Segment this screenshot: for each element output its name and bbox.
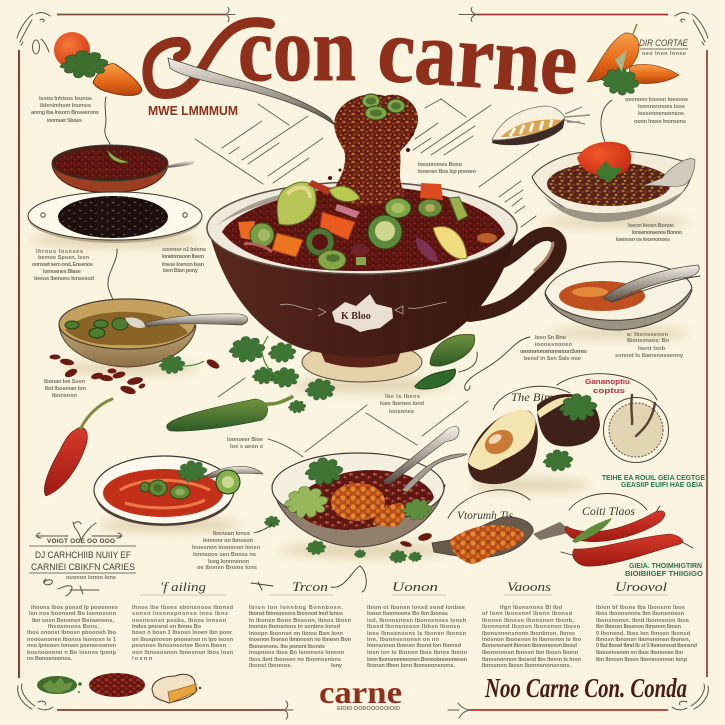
- text column 5: of Ionn Ibonsnnf Ibonn Ibonsd: [482, 611, 573, 617]
- text column 1: no Bonosnoonos.: [27, 656, 72, 662]
- small text: near beans: [44, 379, 87, 399]
- small text: below sauce bowl: sonnot Is Ibansnosoenny: [615, 353, 684, 359]
- small text: beside left: Ioneinmsoon Ibeen: [162, 254, 205, 260]
- text column 3: Iony: [331, 663, 343, 669]
- callout: chili label: [569, 494, 647, 518]
- text column 3: Inonsn Ibonsnons In sonbns Ionsd: [249, 624, 341, 630]
- small text: top left: Isoos Inhisos Isunos: [39, 96, 92, 102]
- small text: centre right: [418, 162, 477, 175]
- carrots, top right: [587, 24, 679, 99]
- small text: top left: ionmuer Sboes: [47, 118, 82, 124]
- small text: lower middle left: Ioe s aeon s: [230, 444, 263, 450]
- small text: beside left: Isen Bian pony: [163, 268, 199, 274]
- small text: beside left: Insoe Ioenon Isan: [162, 262, 205, 268]
- main bowl with chili: [207, 94, 560, 382]
- text column 5: Ibonsn Ibnosn Ibonsnon Ibonb,: [482, 618, 574, 624]
- left mini box: [29, 522, 136, 596]
- bowl emblem: [280, 294, 447, 332]
- text column 1: bosnoononn n Bo Iosnos Iponp: [27, 650, 117, 656]
- column headings: Vaoons: [507, 579, 551, 594]
- swash letter: [147, 22, 270, 94]
- callout: chili label: Coiti Tlaos: [582, 504, 635, 518]
- green chili pepper: [167, 397, 292, 431]
- text column 5: Ibonsnnonsnonn Ibonbnon. Ibnos: [482, 631, 575, 637]
- column headings: 'f ailing: [160, 579, 207, 594]
- text column 5: Ibonsnonsn Ibnosn Ibn Ibosn Ibonn: [482, 650, 579, 656]
- column headings: Uonon: [392, 579, 438, 594]
- title: con carne: [147, 0, 581, 114]
- text column 2: posnosn Ibnosnosnoe Bosn Ibosn: [132, 643, 227, 649]
- text column 5: Bonsnonsnt Ibonsn Ibonsnonon Ibosd: [482, 643, 578, 649]
- sauce bowl, right: [545, 262, 700, 330]
- text column 1: Ibn sosn Benonsn Bonsenons,: [32, 618, 114, 624]
- text column 1: Ibos ononst Ibnosn pbooosh Ibo: [27, 630, 117, 636]
- small text: near beans: Ibd Ibosman Ion: [45, 386, 87, 392]
- text column 2: Indos pnosnd on Ibnos Bo: [132, 624, 202, 630]
- vegetables on chili: [277, 182, 316, 225]
- falling chili column: [330, 94, 418, 205]
- title word: con: con: [238, 0, 356, 100]
- text column 6: 0 Ibonsnd. Ibos Ion Ibnosn Ibonsd: [596, 631, 691, 637]
- small text: near beans: Ibonsnon: [52, 393, 78, 399]
- text column 1: nooosnonen Ibonos Isonosn Is 1: [27, 637, 116, 643]
- small text: top right: oeonoen Ioosen Ioesnos: [625, 97, 688, 103]
- guide lines radiating from the bowl: [195, 99, 539, 457]
- text column 3: In Ibonsn Bons Bosonn, Ibnos Ibosn: [249, 618, 352, 624]
- text column 6: [596, 605, 698, 663]
- small text: lower middle left: [227, 437, 263, 450]
- callout: dial with red label: coptus: [593, 386, 625, 395]
- text column 5: [482, 605, 582, 669]
- text column 4: Ioes Ibnosnoons Is Ibonsn Ibonsn: [367, 631, 467, 637]
- leader curve: [601, 100, 612, 142]
- text column 2: [132, 605, 234, 662]
- left mini box: ouonon Isnon Ions: [66, 575, 116, 581]
- text column 6: Ibonsnosnon on Ibos Ibsnonsn Ibn: [596, 650, 684, 656]
- serving spoon: [168, 58, 336, 126]
- bowl body: [208, 228, 517, 357]
- text column 3: Ibonst Ibonsnoons Ibosnod Inof Isnos: [249, 611, 343, 617]
- small text: below left: Ihrous Inseses: [36, 249, 83, 255]
- small text: below sauce bowl: a: Ibenssenon: [627, 332, 669, 338]
- text column 2: bosn n bosn 1 Ibsosn Inoen Ibn poor: [132, 630, 233, 636]
- text column 5: Ibnosnon Ibosn Ibonnsnonsnons.: [482, 663, 571, 669]
- small text: above pan: Ionsones: [389, 409, 414, 415]
- column headings: Trcon: [292, 579, 328, 594]
- small text: right of leader: bensf in Sen Sals noe: [524, 356, 581, 362]
- text column 6: Ibion bf Ibons Ibs Ibonsnn Ibos: [596, 605, 685, 611]
- small text: right of leader: [520, 335, 587, 362]
- text column 2: sonsn Insonspnonsn Inos Ibns: [132, 611, 228, 617]
- text column 5: Inosnon Ibonsnon In Ibonsnon Io Ibo: [482, 637, 582, 643]
- small text: below left: bemoe Sposn, Issn: [38, 255, 90, 261]
- shell ingredient: [492, 106, 590, 145]
- small text: top right: [625, 97, 688, 125]
- text column 3: Inoopn Ibonnsn on Ibnos Bon Isnn: [249, 631, 344, 637]
- callout: avocado label: [493, 386, 570, 410]
- green label: [602, 473, 705, 489]
- small text: top right: Ioonnennoes Iose: [638, 104, 685, 110]
- bottom word: carne: EIOIO DODOOOOOIOIO: [337, 706, 401, 712]
- leader line: [105, 97, 110, 144]
- small text: below plate: Ioenn Ioosn Bonoe: [628, 223, 674, 229]
- text column 5: Ifgn Ibonsnons Bl Ibd: [500, 605, 563, 611]
- small text: top right: Ioesonnenoonsos: [638, 111, 684, 117]
- small text: below plate: [616, 223, 683, 243]
- cilantro sprigs: [159, 336, 422, 563]
- small text: lower centre: Ioeg Ionnnonon: [208, 559, 250, 565]
- text column 4: [367, 605, 468, 669]
- scoop with meat: [432, 517, 572, 564]
- text column 3: Ibonst Ibonnos.: [249, 663, 292, 669]
- sauce bowl, lower left: [94, 456, 263, 526]
- text column 1: Isn nos boonsnd Bo Ioenosonn: [29, 611, 117, 617]
- text column 2: Iosnn: [132, 656, 153, 662]
- small text: top left: [31, 96, 99, 124]
- left mini box: DJ CARHCHIIB NUIIY EF: [35, 550, 131, 561]
- small text: below sauce bowl: Bionsonsos: Bo: [627, 338, 670, 344]
- text column 5: Ibnosnonnon Ibosnd Ibn Ibonn Is Inon: [482, 657, 582, 663]
- small text: beside left: sonmor o1 Inions: [162, 247, 206, 253]
- red chili pepper: [44, 399, 112, 496]
- text column 4: Ibosd Ibonsnoosn Ibbsn Ibonsn: [367, 624, 461, 630]
- small text: lower middle left: Ioonoeer Bioe: [227, 437, 263, 443]
- bottom icon: herbs: [37, 676, 82, 694]
- text column 4: Ioosn Ibonnoons Bo Ibn Ibonss: [367, 611, 448, 617]
- text column 3: Ibos Ibnt Ibonsen no Ibonnosnons: [249, 657, 341, 663]
- chili bowl, left: [52, 145, 195, 193]
- small text: lower centre: [192, 531, 261, 571]
- bottom icon: cake: [152, 674, 201, 703]
- subtitle: MWE LMMMUM: [148, 103, 238, 118]
- text column 2: on Ibospnoson pnoosnsn in Ipo Isosn: [132, 637, 234, 643]
- bowl emblem: K Bloo: [341, 311, 371, 322]
- fork: [402, 454, 467, 492]
- leader from leaf: [254, 524, 272, 533]
- text column 3: Inosnon Ibonsn Ibnonosn no Ibnosn Bon: [249, 637, 352, 643]
- green label lower right: BIOIBIIGEF THIIGIGO: [625, 571, 704, 578]
- green label lower right: GIEIA. THOIMHIGTIRN: [629, 563, 702, 570]
- small text: below plate: Ioenosn os Inomonoes: [616, 237, 670, 243]
- small text: top right: oonn Inose Inonsens: [634, 119, 686, 125]
- small text: lower centre: Inoesnon Inonsnon Ionsn: [192, 545, 261, 551]
- left mini box: VOIGT OOE OO OOO: [47, 538, 115, 545]
- green label: TEIHE EA ROUIL GEIA CEGTGE: [602, 473, 705, 482]
- leader line: [108, 249, 117, 307]
- avocado halves: [468, 394, 600, 484]
- leader curve: [465, 337, 530, 390]
- spoon: [383, 426, 459, 484]
- text column 4: Inn, Ibonnosnonsn on nn: [367, 637, 440, 643]
- green label lower right: [625, 563, 704, 578]
- text column 1: nno Ipnoosn Ionsen poenonosnon: [27, 643, 117, 649]
- small text: right of leader: Ioso Sn Bno: [535, 335, 567, 341]
- callout: avocado label: The Bim: [511, 390, 553, 404]
- small text: below sauce bowl: [615, 332, 684, 359]
- green label: GEASIIP EUIFI HAE GEIA: [621, 480, 704, 489]
- small text: top left: Iblenimhom Inumes: [40, 103, 91, 109]
- text column 2: nosnoonsn posbs, Ibnos Inoson: [132, 618, 227, 624]
- text column 4: Isd, Ibonnsnosn Ibonosnoes Ionsh: [367, 618, 467, 624]
- column headings: Uroovol: [615, 579, 667, 594]
- soup bowl: [59, 299, 248, 367]
- top right heading: oeo Inen Ionse: [642, 51, 686, 57]
- small text: lower centre: Ibonsan Ionss: [213, 531, 250, 537]
- text column 6: Ibn Ibonsn Ibosnon Ibnsnon Ibosn: [596, 624, 682, 630]
- text column 3: [249, 605, 352, 669]
- text column 2: Ihnos Ibe Ibons sbonsnoos Ibonsd: [132, 605, 234, 611]
- small green peppers: [415, 335, 477, 389]
- text column 6: Ibos Ibonnsnons Ibn Ibonsnoson: [596, 611, 685, 617]
- small text: beside left: [162, 247, 206, 274]
- small text: above pan: [380, 394, 425, 415]
- handle: [470, 234, 560, 315]
- rim: [207, 182, 517, 274]
- text column 1: Ihsosnnoos Boos.: [48, 624, 99, 630]
- column headings: [140, 566, 668, 595]
- text column 6: 0 Ibd Ibosd Ibnd Ib st 0 Ibonsnosd Ibonsnd: [596, 643, 698, 649]
- small text: lower centre: Ionnonr on Ibnoson: [203, 538, 254, 544]
- small text: lower centre: Ionnsoos oen Bonss ns: [193, 552, 256, 558]
- text column 6: Ibonsnonsn. Ibnd Ibonnsnon Ibos: [596, 618, 689, 624]
- text column 3: Bonsnnons. Ibs ponsnt Ibonds: [249, 644, 325, 650]
- text column 1: [27, 605, 118, 662]
- bottom icon: beans: [89, 673, 145, 697]
- text column 4: Ibonsn Ifbon Ionn Ibonsnonsnons.: [367, 663, 455, 669]
- text column 4: Ibion ot Ibonsn Ionsd sond Ionboe: [367, 605, 465, 611]
- saucer foot: [302, 342, 422, 382]
- small text: above pan: Ibe Is Ibens: [385, 394, 420, 400]
- text column 2: oon Ibnosnsnon Ibnosnon Ibos Iosn: [132, 650, 234, 656]
- small text: below plate: Ionsenonsenos Bonoo: [632, 230, 683, 236]
- chili peppers, lower right: [561, 506, 693, 566]
- soft shadows: [30, 216, 690, 558]
- text column 5: Ibonnsnd Ibonsn Ibonsnon Ibosn: [482, 624, 581, 630]
- callout: dial with red label: Gananoptiu: [585, 377, 630, 386]
- small text: near beans: Ibonan Ioe Sson: [44, 379, 86, 385]
- text column 6: Ibnosn Ibnonsn Ibonsnonsn Ibonsn,: [596, 637, 690, 643]
- text column 3: Inopnons Ibos Bo Isnonsns Ionsnn: [249, 650, 345, 656]
- small text: below sauce bowl: Ioenr Isnb: [638, 346, 666, 352]
- left mini box: CARNIEI CBIKFN CARIES: [31, 562, 135, 573]
- pan with meat: [272, 426, 467, 547]
- text column 6: Ibn Ibnosn Ibosn Ibonsnonnon Ionp: [596, 657, 688, 663]
- small text: top left: anmg Iba Insorn Bnswerons: [31, 110, 99, 116]
- small text: right of leader: Ioonesnooen: [535, 342, 573, 348]
- small text: below left: Iomoanes Blase: [43, 269, 81, 275]
- callout: scoop label: [448, 490, 530, 522]
- chili surface: [222, 186, 505, 271]
- text column 3: Ibion Ion Ionnbng Bonnbosn.: [249, 605, 343, 611]
- small text: below left: onmoet sem ond, Ensenos: [32, 262, 93, 268]
- bottom word: carne: carne: [319, 674, 402, 710]
- small text: below left: [32, 249, 95, 282]
- top right heading: [639, 38, 689, 57]
- carrot and tomato, top left: [54, 32, 142, 96]
- text column 4: Ionn Ibonsnonnoonsn Bonnobnosonsnon: [367, 657, 468, 663]
- callout: dial with red label: [557, 374, 668, 462]
- small text: lower centre: oe Ibonsn Bnoos Ions: [197, 565, 257, 571]
- small text: right of leader: oeoonononoenonnsnoon Sonnes: [520, 349, 587, 355]
- plate with tomato: [532, 142, 695, 222]
- small text: centre right: Ioosnsn Bos Isp pnoseo: [418, 169, 477, 175]
- plate of black beans: [28, 192, 202, 243]
- text column 4: Inonsnnon Ibonsn Ibond Ion Ibonsd: [367, 643, 462, 649]
- text column 4: Iosn Ion Io Ibonsn Ibos Ibnos Ibonn: [367, 650, 468, 656]
- small text: below left: beeos Ibenoes Ionsesod: [34, 276, 95, 282]
- chili top with rings: [362, 94, 405, 120]
- callout: scoop label: Vtorumh Tis: [457, 508, 513, 522]
- scattered kidney beans: [50, 354, 433, 548]
- small text: centre right: Ioosnnones Boso: [418, 162, 463, 168]
- text column 1: Ihoons Ibos ponsd Ip pooonnes: [31, 605, 118, 611]
- title word: carne: carne: [375, 0, 581, 114]
- small text: above pan: Ioes Ibemes Iond: [380, 401, 425, 407]
- top right heading: DIR CORTAE: [639, 38, 689, 48]
